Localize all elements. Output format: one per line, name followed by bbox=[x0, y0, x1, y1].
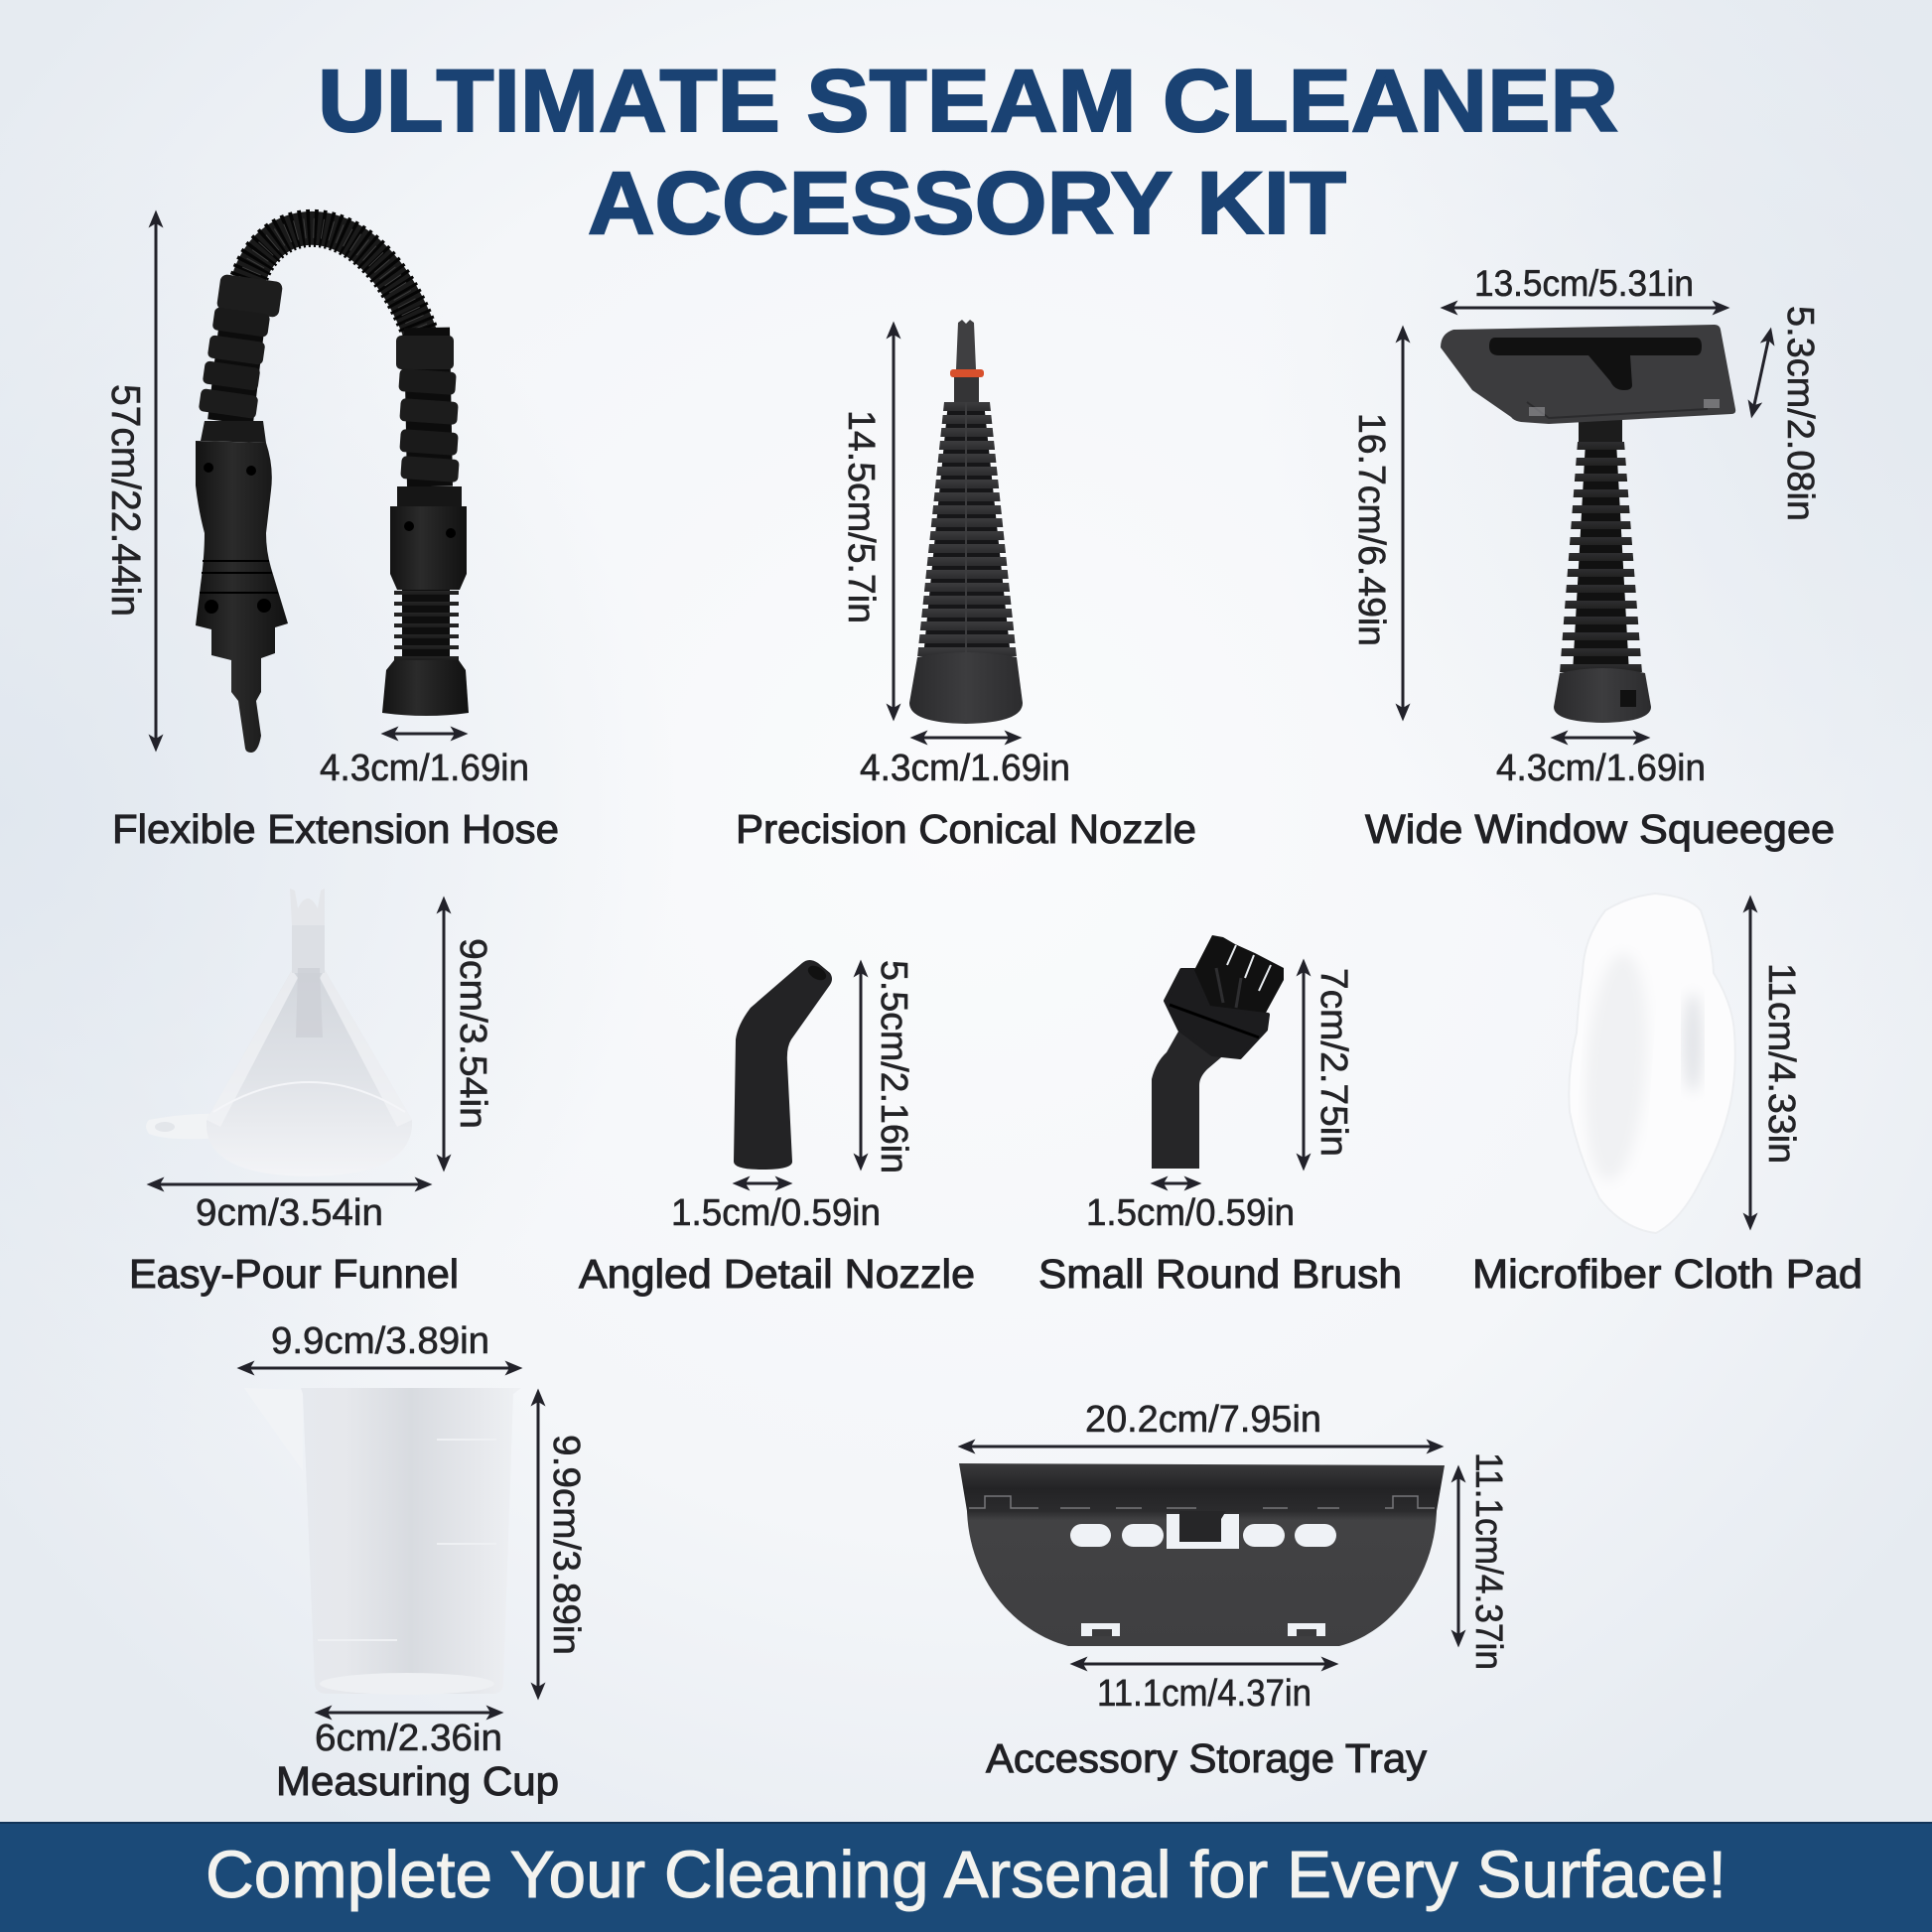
arrow: tray width bbox=[962, 1446, 1440, 1448]
label: nozzle: Precision Conical Nozzle bbox=[736, 806, 1196, 852]
title: ACCESSORY KIT bbox=[588, 153, 1346, 252]
arrow: cup height bbox=[536, 1393, 540, 1696]
panel: angled detail nozzle bbox=[579, 960, 975, 1297]
arrow: brush height bbox=[1303, 963, 1305, 1167]
panel: microfiber cloth pad bbox=[1472, 894, 1863, 1297]
dimension: tray width: 20.2cm/7.95in bbox=[1085, 1399, 1321, 1441]
dimension: cup height: 9.9cm/3.89in bbox=[545, 1435, 587, 1655]
label: brush: Small Round Brush bbox=[1038, 1251, 1402, 1297]
footer banner bbox=[0, 1822, 1932, 1932]
label: pad: Microfiber Cloth Pad bbox=[1472, 1251, 1863, 1297]
dimension: angled nozzle diameter: 1.5cm/0.59in bbox=[671, 1192, 881, 1234]
dimension: squeegee length: 16.7cm/6.49in bbox=[1350, 413, 1392, 646]
icon: squeegee bbox=[1441, 325, 1735, 723]
dimension: hose length: 57cm/22.44in bbox=[103, 384, 149, 617]
dimension: angled nozzle height: 5.5cm/2.16in bbox=[873, 960, 914, 1173]
dimension: cup top width: 9.9cm/3.89in bbox=[271, 1320, 489, 1362]
label: tray: Accessory Storage Tray bbox=[986, 1735, 1428, 1781]
arrow: squeegee diameter bbox=[1555, 737, 1646, 739]
panel: easy-pour funnel bbox=[129, 889, 493, 1297]
panel: measuring cup bbox=[241, 1320, 587, 1804]
dimension: brush height: 7cm/2.75in bbox=[1312, 968, 1354, 1157]
dimension: nozzle length: 14.5cm/5.7in bbox=[840, 410, 882, 623]
icon: cup bbox=[244, 1388, 521, 1695]
panel: small round brush bbox=[1038, 935, 1402, 1297]
dimension: nozzle diameter: 4.3cm/1.69in bbox=[860, 748, 1070, 789]
label: hose: Flexible Extension Hose bbox=[112, 806, 559, 852]
arrow: angled nozzle diameter bbox=[737, 1181, 788, 1185]
dimension: squeegee depth: 5.3cm/2.08in bbox=[1779, 306, 1821, 521]
arrow: squeegee width bbox=[1445, 306, 1725, 310]
icon: brush bbox=[1152, 935, 1284, 1169]
icon: conical nozzle bbox=[909, 320, 1023, 724]
arrow: brush diameter bbox=[1155, 1181, 1197, 1185]
arrow: tray depth bbox=[1457, 1469, 1459, 1643]
icon: angled nozzle bbox=[734, 960, 832, 1170]
arrow: angled nozzle height bbox=[860, 964, 862, 1167]
panel: wide window squeegee bbox=[1350, 263, 1835, 852]
dimension: tray depth: 11.1cm/4.37in bbox=[1467, 1452, 1509, 1670]
dimension: funnel width: 9cm/3.54in bbox=[196, 1192, 383, 1234]
dimension: tray base width: 11.1cm/4.37in bbox=[1097, 1673, 1311, 1715]
title bbox=[318, 51, 1618, 252]
icon: hose bbox=[196, 228, 469, 753]
arrow: cup base width bbox=[319, 1712, 499, 1714]
arrow: cup top width bbox=[241, 1366, 518, 1370]
icon: funnel bbox=[146, 889, 412, 1176]
arrow: nozzle length bbox=[892, 326, 896, 717]
footer banner: Complete Your Cleaning Arsenal for Every Surface! bbox=[206, 1838, 1726, 1912]
dimension: hose diameter: 4.3cm/1.69in bbox=[320, 748, 529, 789]
icon: cloth pad bbox=[1569, 894, 1735, 1233]
dimension: brush diameter: 1.5cm/0.59in bbox=[1086, 1192, 1295, 1234]
arrow: squeegee depth bbox=[1752, 332, 1770, 414]
panel: accessory storage tray bbox=[959, 1399, 1509, 1781]
dimension: pad height: 11cm/4.33in bbox=[1760, 963, 1802, 1164]
title: ULTIMATE STEAM CLEANER bbox=[318, 51, 1618, 150]
label: squeegee: Wide Window Squeegee bbox=[1365, 806, 1835, 852]
dimension: squeegee width: 13.5cm/5.31in bbox=[1474, 263, 1694, 304]
arrow: nozzle diameter bbox=[914, 737, 1018, 739]
dimension: cup base width: 6cm/2.36in bbox=[315, 1718, 502, 1759]
dimension: squeegee diameter: 4.3cm/1.69in bbox=[1496, 748, 1706, 789]
label: angled nozzle: Angled Detail Nozzle bbox=[579, 1251, 975, 1297]
arrow: hose diameter bbox=[385, 733, 464, 735]
arrow: funnel height bbox=[443, 900, 445, 1168]
dimension: funnel height: 9cm/3.54in bbox=[452, 938, 493, 1129]
icon: tray bbox=[959, 1463, 1445, 1646]
arrow: pad height bbox=[1749, 899, 1751, 1226]
panel: precision conical nozzle bbox=[736, 320, 1196, 852]
label: cup: Measuring Cup bbox=[276, 1758, 559, 1804]
arrow: tray base width bbox=[1074, 1662, 1334, 1666]
arrow: funnel width bbox=[151, 1183, 428, 1185]
label: funnel: Easy-Pour Funnel bbox=[129, 1251, 459, 1297]
panel: flexible extension hose bbox=[103, 214, 559, 852]
arrow: squeegee length bbox=[1402, 330, 1404, 717]
arrow: hose length bbox=[155, 214, 157, 748]
